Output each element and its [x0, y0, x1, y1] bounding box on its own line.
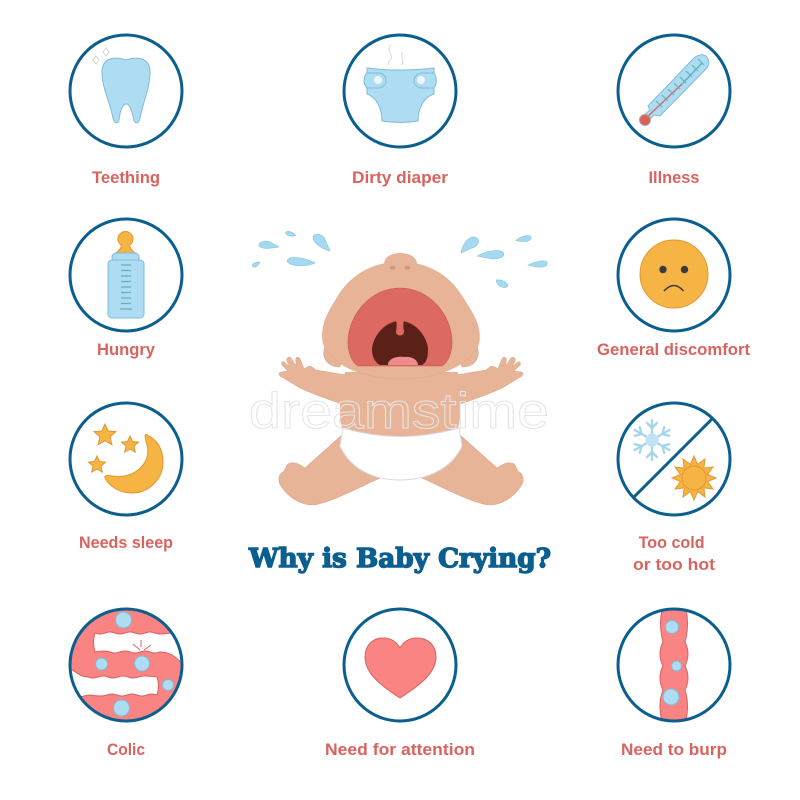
- mouth: [348, 288, 452, 366]
- tongue: [388, 357, 418, 365]
- panel: dirty diaper: [344, 35, 456, 187]
- throat: [372, 321, 428, 365]
- label: illness: Illness: [648, 168, 700, 187]
- label: too cold or too hot: Too cold: [639, 533, 705, 552]
- panel: hungry: [70, 219, 182, 359]
- circle: need to burp: [618, 609, 730, 721]
- right leg: [422, 435, 523, 505]
- nose: [384, 253, 417, 272]
- label: needs sleep: Needs sleep: [79, 533, 173, 552]
- label: too cold or too hot: or too hot: [633, 555, 715, 574]
- circle: illness: [618, 35, 730, 147]
- icon: stars: [88, 424, 138, 472]
- panel: colic: [65, 609, 190, 759]
- panel: needs sleep: [70, 403, 182, 552]
- panel: teething: [70, 35, 182, 187]
- diagonal: [634, 419, 712, 497]
- icon: sun: [672, 456, 716, 500]
- label: hungry: Hungry: [97, 340, 156, 359]
- left leg: [279, 435, 380, 505]
- circle: teething: [70, 35, 182, 147]
- body: [340, 372, 461, 436]
- icon: bottle: [108, 232, 144, 318]
- tears: [252, 231, 547, 288]
- icon: snaps: [374, 76, 425, 84]
- icon: moon: [105, 435, 163, 493]
- diaper: [340, 428, 462, 480]
- circle: dirty diaper: [344, 35, 456, 147]
- circle: general discomfort: [618, 219, 730, 331]
- label: need to burp: Need to burp: [621, 740, 727, 759]
- icon: steam: [388, 45, 403, 65]
- icon: thermometer: [640, 55, 709, 126]
- label: general discomfort: General discomfort: [597, 340, 750, 359]
- panel: need for attention: [325, 609, 475, 759]
- label: dirty diaper: Dirty diaper: [352, 168, 448, 187]
- circle: need for attention: [344, 609, 456, 721]
- head: [322, 262, 480, 379]
- panel: too cold or too hot: [618, 403, 730, 574]
- right arm: [456, 357, 523, 404]
- ears: [324, 345, 478, 367]
- left arm: [279, 357, 346, 404]
- icon: diaper: [367, 68, 434, 122]
- circle: too cold or too hot: [618, 403, 730, 515]
- circle: needs sleep: [70, 403, 182, 515]
- label: need for attention: Need for attention: [325, 740, 475, 759]
- icon: esophagus: [660, 605, 688, 725]
- icon: tooth: [102, 58, 150, 123]
- icon: diaper tabs: [364, 73, 436, 88]
- circle: colic: [70, 609, 182, 721]
- panel: general discomfort: [597, 219, 750, 359]
- icon: snowflake: [632, 420, 672, 460]
- icon: sparkles: [93, 48, 109, 64]
- title: Why is Baby Crying?: [248, 544, 551, 574]
- panel: illness: [618, 35, 730, 187]
- nostrils: [390, 266, 410, 270]
- label: colic: Colic: [107, 740, 145, 759]
- watermark: dreamstime: [249, 383, 549, 439]
- icon: intestine: [72, 610, 180, 720]
- panel: need to burp: [618, 605, 730, 759]
- uvula: [396, 321, 404, 336]
- circle: hungry: [70, 219, 182, 331]
- icon: heart: [365, 638, 436, 698]
- crying baby illustration: [249, 231, 549, 505]
- label: teething: Teething: [92, 168, 160, 187]
- icon: sad face: [640, 240, 708, 308]
